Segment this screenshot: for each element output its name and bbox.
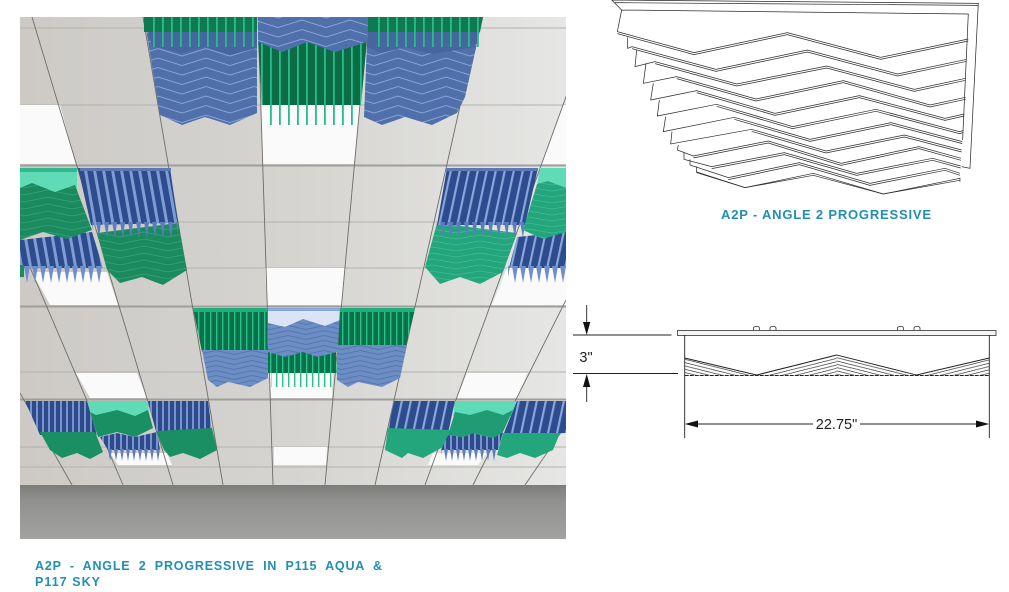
- baffle: right blue fins and green: [497, 401, 566, 458]
- baffle: top left blue with green fins: [144, 17, 257, 125]
- baffle group: centre: [193, 308, 415, 387]
- panel layer edges: [617, 34, 968, 194]
- backing plate: [678, 330, 996, 336]
- baffle: fins blue lower right: [508, 232, 566, 284]
- baffle: lower fins blue centre: [441, 432, 503, 462]
- baffle: fins blue lower left: [20, 232, 104, 284]
- technical drawing: isometric panel: [612, 0, 978, 194]
- baffle group: bottom left: [25, 401, 217, 462]
- baffle: centre right green fins and blue: [337, 308, 415, 387]
- baffle: green chevron: [425, 223, 517, 284]
- dimension: width: 22.75": [816, 417, 857, 433]
- caption: photo finish: [35, 559, 382, 589]
- baffle: aqua and green: [20, 168, 92, 240]
- technical drawing: section with dimensions: [573, 305, 996, 438]
- arrow: height dimension top: [583, 305, 590, 335]
- photo: ceiling with acoustic baffles: [20, 17, 595, 539]
- baffle group: bottom right: [385, 401, 566, 462]
- baffle: green chevron: [97, 223, 187, 285]
- arrow: height dimension bottom: [583, 374, 590, 402]
- baffle: top centre green with blue chevron: [258, 17, 368, 125]
- baffle: lower left blue fins and green: [25, 401, 103, 459]
- caption: photo finish: A2P - ANGLE 2 PROGRESSIVE IN P115 AQUA &: [35, 559, 382, 573]
- baffle: fins blue upper: [78, 168, 178, 239]
- heading: isometric drawing label: A2P - ANGLE 2 PROGRESSIVE: [721, 207, 931, 222]
- baffle group: second row right: [425, 168, 566, 284]
- baffle: left blue fins and green: [385, 401, 455, 458]
- panel layers: [617, 32, 968, 194]
- baffle: lower right blue fins and green: [148, 401, 217, 459]
- baffle: centre middle light blue and green: [268, 308, 340, 387]
- caption: photo finish: P117 SKY: [35, 575, 101, 589]
- height extension lines: [573, 335, 678, 374]
- panel backing outline: [612, 0, 978, 168]
- dimension: height: 3": [579, 350, 593, 366]
- ceiling tiles: [20, 17, 566, 485]
- baffle: top right blue with green fins: [364, 17, 483, 125]
- baffle: lower fins blue centre: [100, 432, 160, 462]
- width extension lines: [685, 335, 989, 438]
- baffle group: second row left: [20, 168, 187, 285]
- mounting clips: [754, 326, 920, 330]
- baffle: aqua and green: [87, 401, 153, 437]
- arrow: width dimension: [685, 420, 989, 428]
- ceiling grid: [20, 17, 595, 485]
- light fixtures: [20, 105, 566, 465]
- baffle: fins blue upper: [437, 168, 538, 239]
- baffle group: top row: [144, 17, 483, 125]
- baffle: aqua and green: [448, 401, 517, 438]
- hatched profile: [685, 355, 989, 376]
- wall: [20, 485, 566, 539]
- baffle: aqua and green: [523, 168, 566, 239]
- baffle: centre left green fins and blue: [193, 308, 268, 387]
